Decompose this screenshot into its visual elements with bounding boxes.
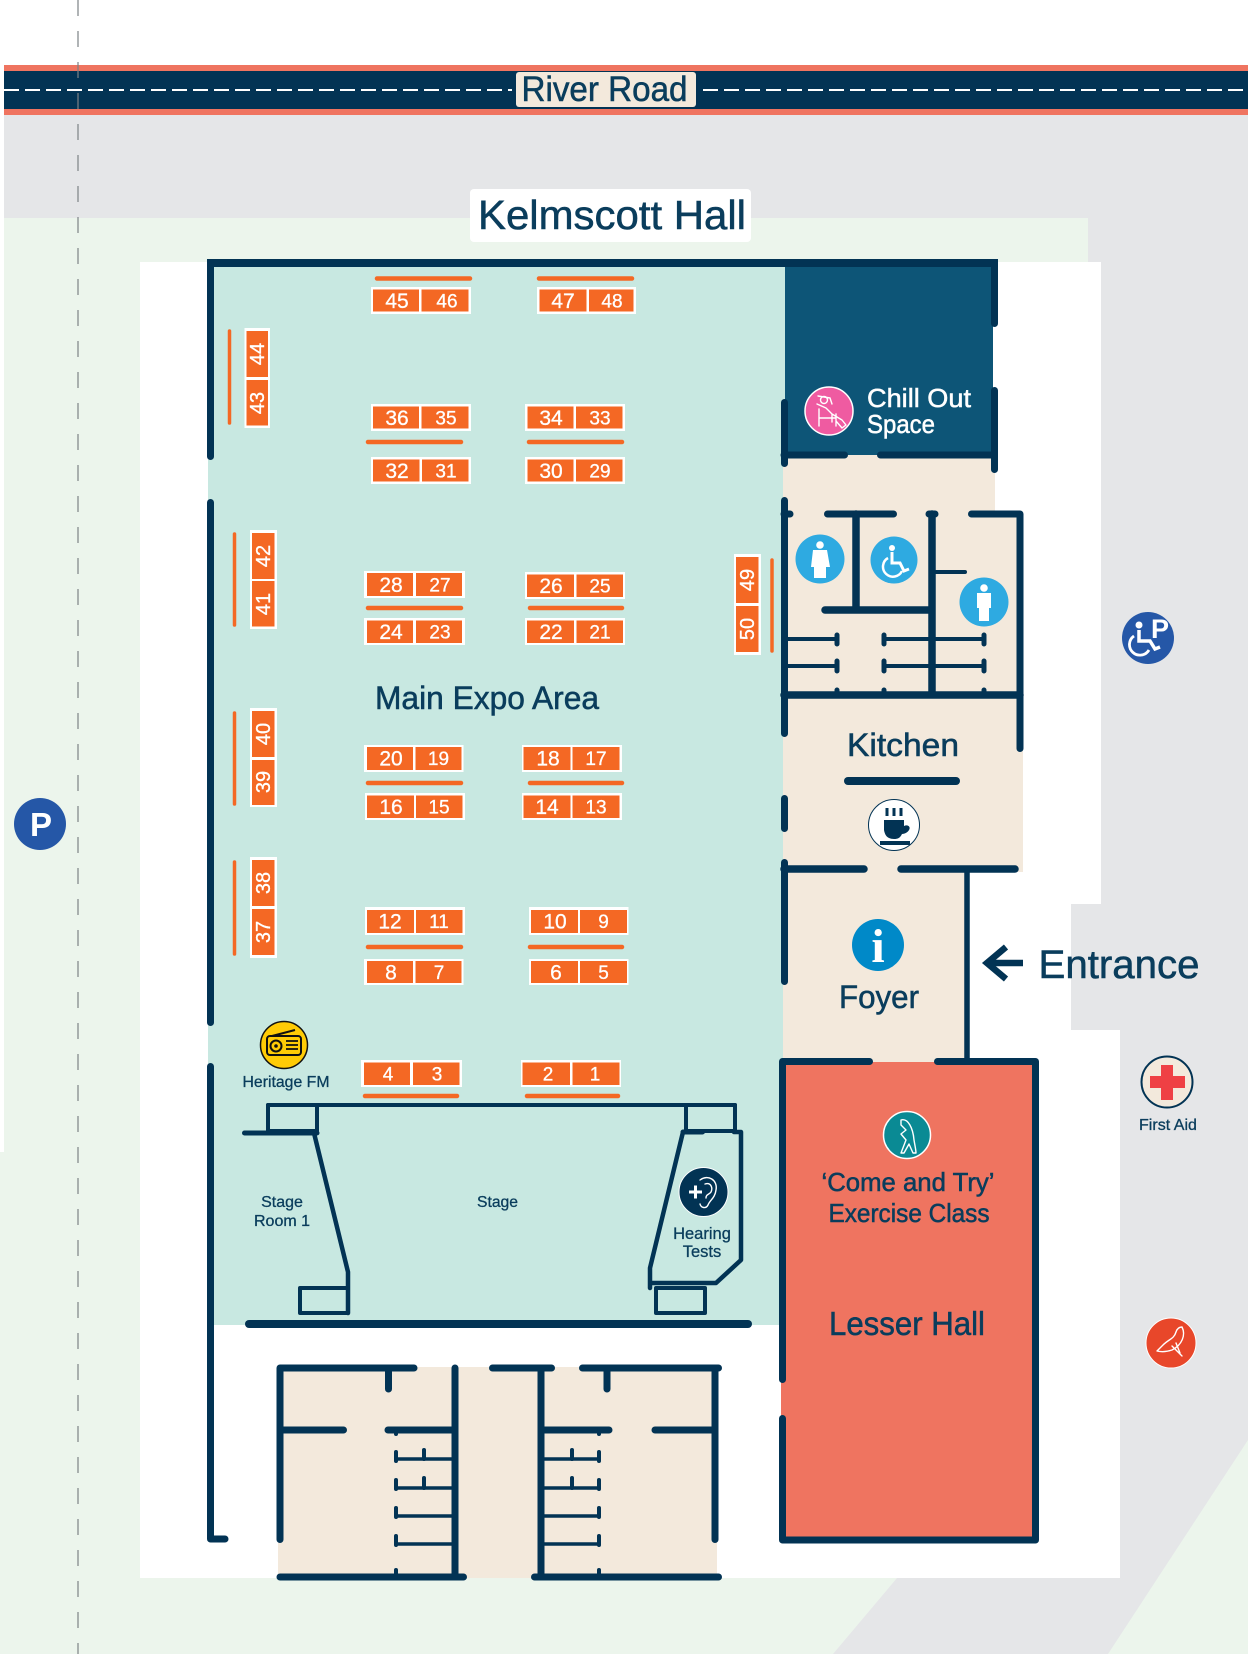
- main expo floor: [208, 262, 785, 1325]
- booths 8 and 7: 7: [434, 963, 444, 984]
- booths 2 and 1: [521, 1060, 621, 1087]
- booths 8 and 7: 8: [385, 962, 397, 984]
- booths 36 and 35: 35: [435, 408, 457, 430]
- booths 16 and 15: [365, 793, 465, 820]
- booths 22 and 21: 21: [589, 622, 611, 644]
- stage outline: [244, 1105, 748, 1324]
- label: Foyer: Foyer: [839, 979, 919, 1015]
- booths 6 and 5: [529, 959, 628, 985]
- icon: coffee cup: [868, 800, 920, 850]
- booths 30 and 29: 30: [539, 460, 563, 483]
- icon: bird: [1146, 1318, 1196, 1368]
- icon: first aid: [1142, 1056, 1192, 1108]
- booths 45 and 46: 45: [385, 290, 409, 313]
- booths 32 and 31: 31: [435, 462, 457, 482]
- booths 45 and 46: 46: [436, 292, 458, 312]
- booths 42 and 41: [250, 530, 277, 629]
- lesser hall floor: [781, 1062, 1034, 1540]
- building walls: [207, 263, 1036, 1540]
- label: Stage Room 1: Stage: [261, 1194, 303, 1211]
- booths 24 and 23: 24: [379, 621, 403, 644]
- booths 10 and 9: 10: [543, 910, 567, 934]
- booths 26 and 25: [525, 572, 625, 599]
- label: Chill Out Space: Space: [867, 409, 935, 439]
- booths 28 and 27: 27: [429, 576, 451, 596]
- booths 2 and 1: 1: [590, 1064, 600, 1086]
- label: Come and Try Exercise Class: Exercise Class: [828, 1198, 990, 1228]
- booths 20 and 19: 19: [428, 749, 449, 770]
- booths 28 and 27: 28: [379, 574, 403, 597]
- icon: hearing: [679, 1168, 728, 1216]
- booths 12 and 11: 11: [429, 912, 449, 933]
- booths 34 and 33: [525, 404, 625, 431]
- label: Stage Room 1: Room 1: [254, 1213, 310, 1230]
- icon: parking: P: [30, 806, 52, 843]
- booths 22 and 21: 22: [539, 621, 563, 644]
- label: Lesser Hall: Lesser Hall: [829, 1305, 985, 1342]
- booths 6 and 5: 5: [598, 963, 609, 984]
- building surround: [140, 262, 1120, 1578]
- booths 40 and 39: 39: [253, 771, 275, 793]
- title: Kelmscott Hall: Kelmscott Hall: [478, 192, 746, 238]
- booths 22 and 21: [525, 618, 625, 645]
- booths 26 and 25: 26: [539, 575, 563, 598]
- booths 2 and 1: 2: [543, 1064, 553, 1086]
- booths 30 and 29: [525, 457, 625, 484]
- road: River Road: [4, 65, 1248, 115]
- booths 12 and 11: [365, 907, 465, 935]
- booths 16 and 15: 15: [428, 798, 450, 818]
- label: Heritage FM: Heritage FM: [242, 1074, 330, 1091]
- booths 14 and 13: 13: [585, 798, 607, 818]
- label: Entrance: Entrance: [1038, 943, 1200, 987]
- booths 4 and 3: 3: [432, 1064, 442, 1086]
- booths 40 and 39: [250, 708, 277, 807]
- label: Hearing Tests: Tests: [683, 1243, 721, 1261]
- booths 32 and 31: 32: [385, 460, 409, 483]
- label: First Aid: First Aid: [1139, 1117, 1197, 1134]
- icon: exercise: [884, 1112, 930, 1158]
- icon: information: [852, 919, 904, 973]
- booths 44 and 43: 44: [247, 343, 269, 365]
- booths 49 and 50: 50: [737, 618, 759, 640]
- booths 20 and 19: 20: [379, 748, 403, 770]
- booths 47 and 48: 48: [601, 292, 623, 312]
- booths 12 and 11: 12: [378, 910, 402, 934]
- chill out room floor: [785, 262, 993, 456]
- lawn area: [0, 218, 1088, 1654]
- booths 14 and 13: 14: [535, 796, 559, 819]
- booths 16 and 15: 16: [379, 796, 403, 819]
- booths 36 and 35: 36: [385, 407, 409, 430]
- icon: accessible parking: P: [1151, 614, 1169, 644]
- booths 47 and 48: 47: [551, 290, 575, 313]
- booths 4 and 3: [361, 1060, 462, 1087]
- booths 6 and 5: 6: [550, 962, 562, 984]
- booths 44 and 43: 43: [247, 392, 269, 414]
- booths 34 and 33: 33: [589, 408, 611, 430]
- booths 45 and 46: [371, 287, 471, 314]
- booths 30 and 29: 29: [589, 462, 611, 482]
- icon: relaxing person: [805, 387, 853, 435]
- icon: information: i: [871, 920, 885, 973]
- booths 10 and 9: [529, 907, 628, 935]
- road: River Road: River Road: [522, 70, 688, 109]
- booths 42 and 41: 42: [253, 545, 275, 567]
- icon: accessible toilet: [870, 536, 918, 584]
- service rooms floor: [783, 455, 1023, 1062]
- stall bars: [230, 278, 772, 1096]
- booths 28 and 27: [364, 571, 465, 598]
- booths 38 and 37: 38: [253, 872, 275, 894]
- icon: parking: [14, 798, 66, 850]
- booths 26 and 25: 25: [589, 576, 611, 598]
- booths 32 and 31: [371, 457, 471, 484]
- booths 34 and 33: 34: [539, 407, 563, 430]
- booths 14 and 13: [522, 793, 622, 820]
- booths 10 and 9: 9: [598, 912, 609, 933]
- booths 49 and 50: [734, 554, 761, 655]
- icon: radio: [260, 1022, 308, 1068]
- arrow: entrance: [986, 947, 1023, 979]
- booths 8 and 7: [364, 959, 464, 985]
- label: Stage: Stage: [477, 1194, 518, 1211]
- icon: male toilet: [960, 578, 1008, 626]
- icon: female toilet: [796, 534, 844, 584]
- lower wing walls: [280, 1368, 718, 1577]
- label: Main Expo Area: Main Expo Area: [375, 680, 599, 716]
- booths 4 and 3: 4: [383, 1064, 394, 1086]
- label: Kitchen: Kitchen: [847, 727, 959, 763]
- booths 24 and 23: 23: [429, 622, 451, 644]
- booths 40 and 39: 40: [253, 723, 275, 745]
- booths 38 and 37: [250, 857, 277, 958]
- booths 36 and 35: [371, 404, 471, 431]
- booths 42 and 41: 41: [253, 593, 275, 615]
- booths 47 and 48: [537, 287, 636, 314]
- booths 49 and 50: 49: [737, 569, 759, 591]
- booths 44 and 43: [244, 328, 270, 428]
- icon: accessible parking: [1122, 612, 1174, 664]
- booths 38 and 37: 37: [253, 921, 275, 943]
- label: Chill Out Space: Chill Out: [867, 383, 972, 413]
- boundary dashed line: [77, 0, 79, 1654]
- label: Hearing Tests: Hearing: [673, 1225, 731, 1243]
- lower wing floor: [278, 1367, 717, 1578]
- booths 24 and 23: [364, 618, 465, 645]
- booths 18 and 17: 18: [536, 748, 560, 770]
- lawn corner: [1108, 1440, 1248, 1654]
- booths 18 and 17: [522, 745, 622, 772]
- booths 20 and 19: [364, 745, 464, 772]
- booths 18 and 17: 17: [585, 749, 607, 770]
- label: Come and Try Exercise Class: ‘Come and Try’: [822, 1167, 994, 1197]
